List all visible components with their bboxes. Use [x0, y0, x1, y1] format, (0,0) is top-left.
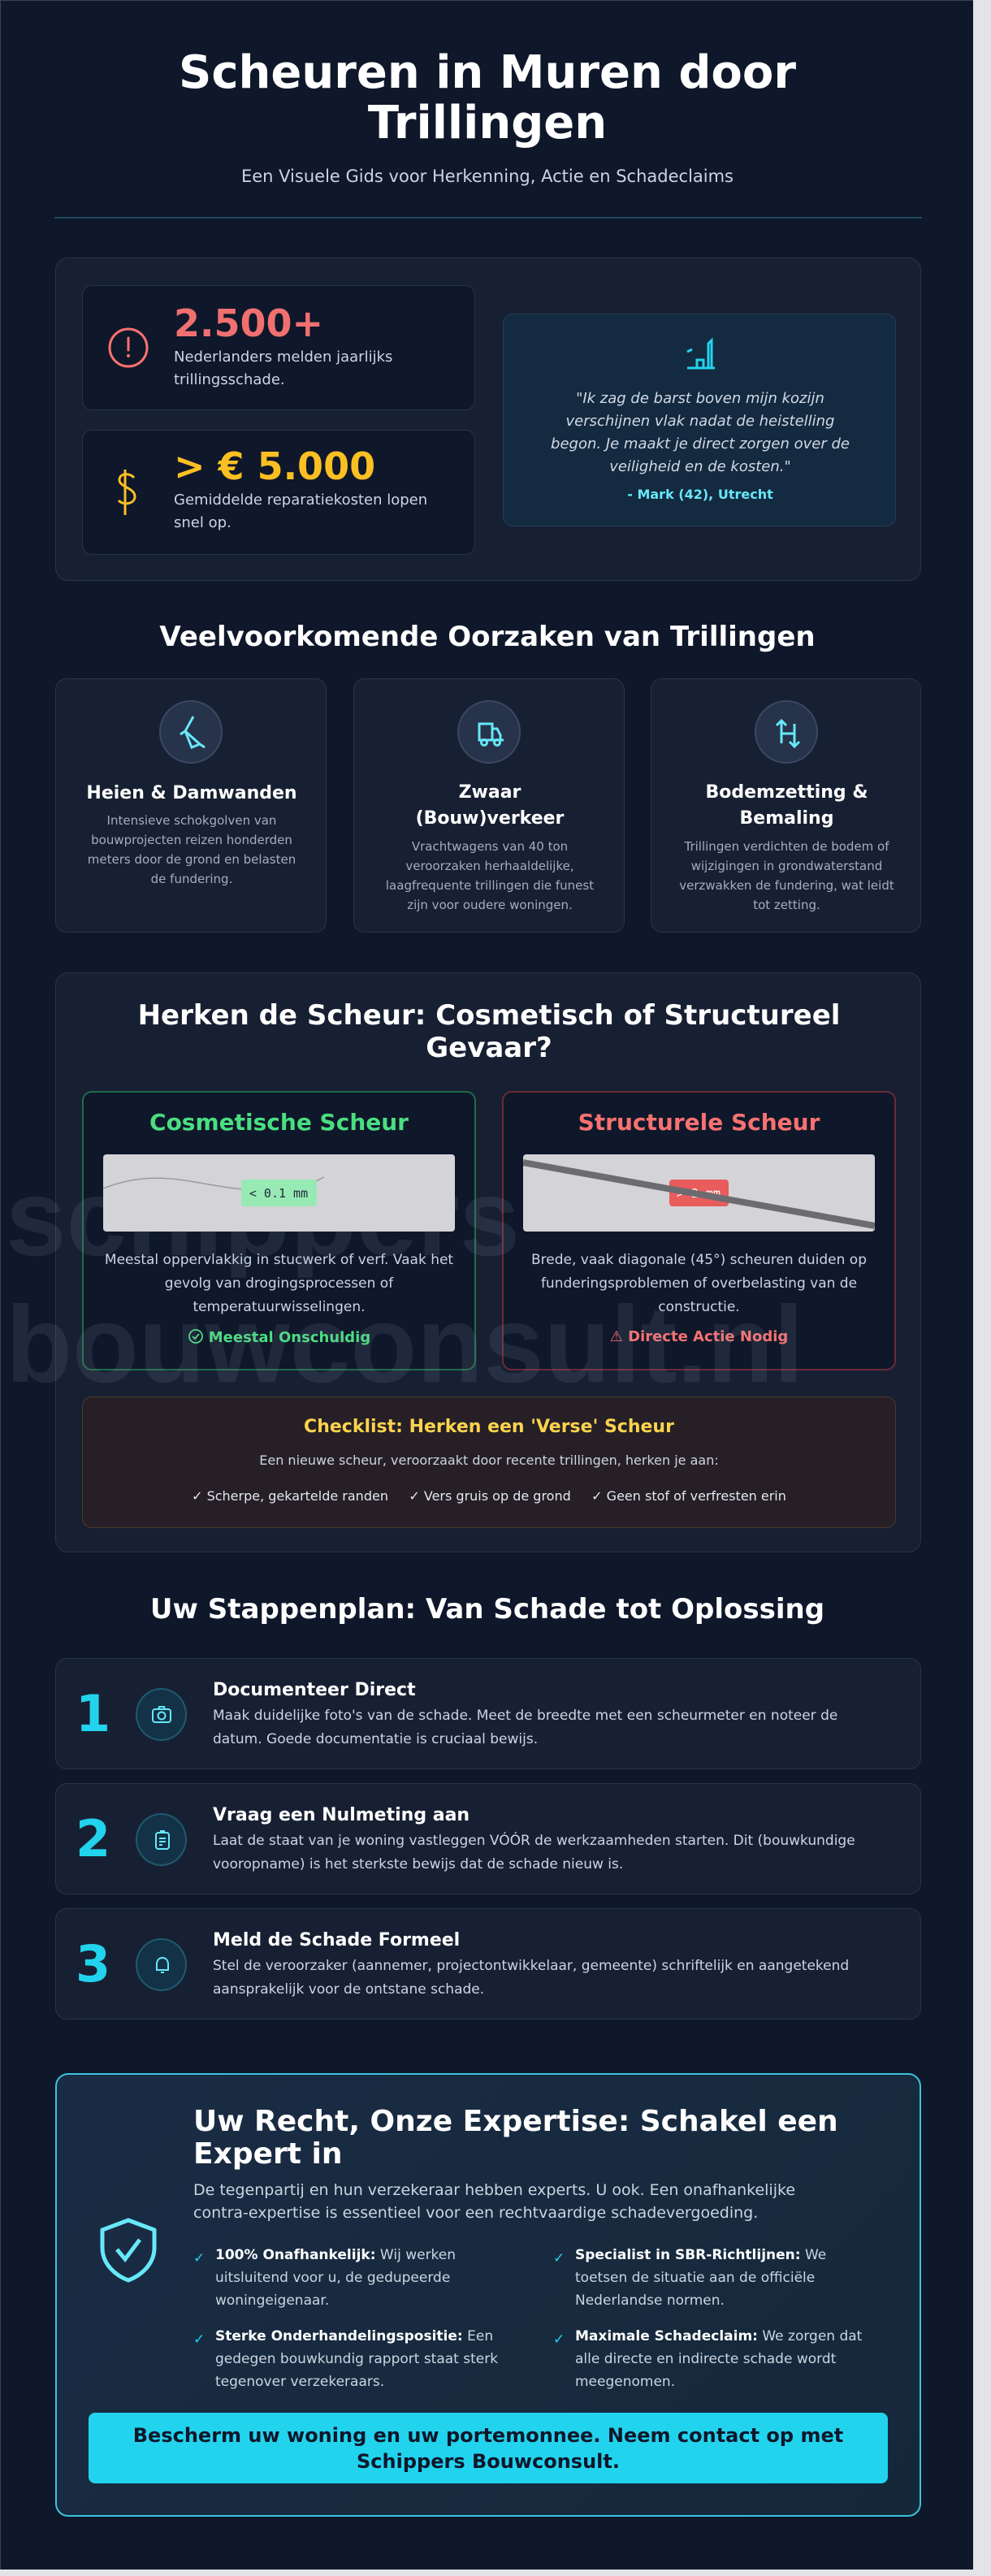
- list: [193, 2247, 862, 2390]
- quote box: "Ik zag de barst boven mijn kozijn verschijnen vlak nadat de heistelling begon. Je maakt je direct zorgen over de veiligheid en de kosten.": [551, 390, 850, 475]
- step 3: [55, 1908, 921, 2020]
- checklist: [82, 1396, 896, 1528]
- heading: stappenplan: Uw Stappenplan: Van Schade tot Oplossing: [150, 1593, 824, 1626]
- stat card: 2.500+: 2.500+: [174, 301, 323, 345]
- illustration: wide crack: > 2 mm: [677, 1186, 721, 1201]
- title: Scheuren in Muren door: [179, 46, 796, 99]
- panel: CTA expertise: 100% Onafhankelijk: Wij werken uitsluitend voor u, de gedupeerde woningeigenaar.: [215, 2247, 456, 2309]
- panel: CTA expertise: [55, 2073, 921, 2517]
- panel: cause 2: Zwaar: [459, 782, 521, 803]
- title: Trillingen: [368, 97, 607, 149]
- step 2: [55, 1783, 921, 1894]
- panel: CTA expertise: ✓: [553, 2250, 565, 2266]
- panel: CTA expertise: Uw Recht, Onze Expertise: Schakel een Expert in: [193, 2105, 838, 2171]
- panel: cause 3: [651, 678, 921, 933]
- panel: cause 2: Vrachtwagens van 40 ton veroorzaken herhaaldelijke, laagfrequente trillingen die funest zijn voor oudere woningen.: [386, 839, 594, 912]
- card: structureel: [502, 1091, 896, 1370]
- panel: cause 3: Bodemzetting &: [705, 782, 868, 803]
- badge: onschuldig: Meestal Onschuldig: [209, 1329, 370, 1346]
- card: cosmetisch: [82, 1091, 476, 1370]
- button: Bescherm uw woning en uw portemonnee. Neem contact op met: [133, 2424, 843, 2447]
- step 3: Meld de Schade Formeel: [213, 1930, 460, 1950]
- step 2: Vraag een Nulmeting aan: [213, 1805, 470, 1825]
- panel: CTA expertise: Specialist in SBR-Richtlijnen: We toetsen de situatie aan de officiële Nederlandse normen.: [575, 2247, 826, 2309]
- quote box: [503, 314, 896, 526]
- heading: Gevaar?: [426, 1032, 552, 1064]
- panel: CTA expertise: De tegenpartij en hun verzekeraar hebben experts. U ook. Een onafhankelijke contra-expertise is essentieel voor een rechtvaardige schadevergoeding.: [193, 2181, 795, 2222]
- illustration: fine crack: [103, 1154, 455, 1232]
- icon: shield: [101, 2218, 156, 2283]
- icon: up-down arrows: [755, 700, 818, 764]
- stat card: 2.500+: Nederlanders melden jaarlijks trillingsschade.: [174, 349, 392, 388]
- button: [89, 2413, 888, 2483]
- panel: cause 1: Intensieve schokgolven van bouwprojecten reizen honderden meters door de grond en belasten de fundering.: [88, 813, 296, 886]
- icon: camera: [136, 1688, 187, 1741]
- stat card: kosten: > € 5.000: [174, 444, 375, 488]
- panel: cause 1: [55, 678, 327, 933]
- step 3: 3: [76, 1934, 110, 1994]
- icon: clipboard: [136, 1813, 187, 1866]
- step 1: Maak duidelijke foto's van de schade. Meet de breedte met een scheurmeter en noteer de datum. Goede documentatie is cruciaal bewijs.: [213, 1708, 837, 1747]
- step 2: 2: [76, 1809, 110, 1868]
- checklist: Checklist: Herken een 'Verse' Scheur: [304, 1417, 674, 1437]
- panel: CTA expertise: Sterke Onderhandelingspositie: Een gedegen bouwkundig rapport staat sterk tegenover verzekeraars.: [215, 2328, 498, 2390]
- heading: [138, 999, 840, 1064]
- checklist: ✓ Scherpe, gekartelde randen ✓ Vers gruis op de grond ✓ Geen stof of verfresten erin: [192, 1488, 786, 1504]
- illustration: fine crack: < 0.1 mm: [249, 1186, 308, 1201]
- panel: CTA expertise: ✓: [193, 2250, 205, 2266]
- title: [179, 46, 796, 149]
- panel: cause 2: (Bouw)verkeer: [416, 808, 564, 829]
- icon: crane/house: [686, 338, 715, 369]
- icon: pile driver: [159, 700, 223, 764]
- panel: herken de scheur: [55, 972, 921, 1552]
- step 1: [55, 1658, 921, 1769]
- step 3: Stel de veroorzaker (aannemer, projectontwikkelaar, gemeente) schriftelijk en aangetekend aansprakelijk voor de ontstane schade.: [213, 1958, 849, 1998]
- card: cosmetisch: Cosmetische Scheur: [149, 1109, 409, 1136]
- stat card: kosten: Gemiddelde reparatiekosten lopen snel op.: [174, 491, 427, 531]
- icon: money: [117, 470, 136, 515]
- panel: stats: [55, 258, 921, 581]
- panel: CTA expertise: ✓: [553, 2331, 565, 2348]
- step 2: Laat de staat van je woning vastleggen VÓÓR de werkzaamheden starten. Dit (bouwkundige vooropname) is het sterkste bewijs dat de schade nieuw is.: [213, 1833, 855, 1872]
- stat card: 2.500+: [82, 285, 475, 410]
- text: bouwconsult.nl: [6, 1284, 804, 1405]
- illustration: wide crack: [523, 1154, 875, 1232]
- panel: CTA expertise: Maximale Schadeclaim: We zorgen dat alle directe en indirecte schade wordt meegenomen.: [575, 2328, 862, 2390]
- panel: cause 1: Heien & Damwanden: [86, 783, 297, 803]
- panel: cause 3: Bemaling: [740, 808, 833, 829]
- step 1: 1: [76, 1684, 110, 1743]
- subtitle: Een Visuele Gids voor Herkenning, Actie en Schadeclaims: [241, 167, 734, 186]
- icon: bell: [136, 1938, 187, 1991]
- heading: Herken de Scheur: Cosmetisch of Structureel: [138, 999, 840, 1032]
- icon: truck: [457, 700, 521, 764]
- watermark: schippers: [6, 1158, 520, 1279]
- panel: cause 3: Trillingen verdichten de bodem of wijzigingen in grondwaterstand verzwakken de fundering, wat leidt tot zetting.: [679, 839, 894, 912]
- panel: CTA expertise: ✓: [193, 2331, 205, 2348]
- card: cosmetisch: Meestal oppervlakkig in stucwerk of verf. Vaak het gevolg van drogingsprocessen of temperatuurwisselingen.: [105, 1252, 453, 1315]
- card: structureel: Structurele Scheur: [578, 1109, 820, 1136]
- heading: oorzaken: Veelvoorkomende Oorzaken van Trillingen: [159, 621, 816, 653]
- badge: actie: ⚠ Directe Actie Nodig: [610, 1328, 788, 1345]
- card: structureel: Brede, vaak diagonale (45°) scheuren duiden op funderingsproblemen of overbelasting van de constructie.: [531, 1252, 867, 1315]
- panel: cause 2: [353, 678, 625, 933]
- stat card: kosten: [82, 430, 475, 555]
- checklist: Een nieuwe scheur, veroorzaakt door recente trillingen, herken je aan:: [259, 1453, 719, 1468]
- quote box: - Mark (42), Utrecht: [627, 487, 773, 502]
- button: Schippers Bouwconsult.: [357, 2450, 620, 2473]
- step 1: Documenteer Direct: [213, 1680, 416, 1700]
- icon: alert: [109, 328, 148, 367]
